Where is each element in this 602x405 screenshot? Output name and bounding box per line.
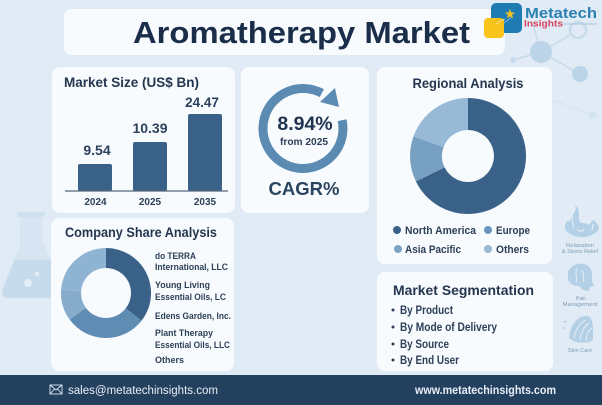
background network graphic (510, 22, 597, 119)
legend: regional: Others (496, 244, 529, 256)
legend: company names: Young Living (155, 280, 210, 291)
icon: relaxation and stress relief: & Stress Relief (562, 249, 599, 255)
legend: company names: Plant Therapy (155, 328, 214, 339)
segmentation list: By Mode of Delivery (400, 322, 498, 334)
panel: company share analysis (51, 218, 234, 371)
panel: market segmentation (377, 272, 553, 371)
segmentation list (392, 305, 498, 367)
bar chart: market size: 2025 (139, 197, 162, 208)
icon: relaxation and stress relief (562, 205, 599, 255)
bar chart: market size: 9.54 (83, 142, 111, 158)
legend: regional: Europe (496, 225, 530, 237)
segmentation list: By Source (400, 339, 449, 351)
bar chart: market size: 2024 (84, 197, 107, 208)
background flask illustration (2, 212, 52, 298)
panel: title (64, 9, 505, 55)
icon: pain management: Pain (576, 296, 586, 302)
legend: company names: Essential Oils, LLC (155, 340, 230, 351)
icon: skin care: Skin Care (568, 348, 592, 354)
bar chart: market size: 24.47 (185, 95, 219, 110)
logo: Metatech Insights: Metatech (525, 6, 597, 22)
legend: company names: Others (155, 355, 184, 366)
footer email: sales@metatechinsights.com (68, 385, 218, 397)
donut chart: company share (61, 248, 151, 338)
CAGR label: CAGR% (269, 178, 339, 199)
segmentation list: By Product (400, 305, 453, 317)
bar chart: market size (65, 95, 228, 208)
panel: regional analysis (377, 67, 552, 264)
bar chart: market size: 10.39 (132, 120, 168, 136)
legend: regional (393, 225, 530, 256)
heading: market segmentation: Market Segmentation (393, 282, 534, 298)
icon: circular arrow (263, 88, 343, 168)
heading: market size: Market Size (US$ Bn) (64, 74, 199, 90)
panel: market size (52, 67, 235, 213)
icon: relaxation and stress relief: Relaxation (566, 243, 594, 249)
icon: pain management (562, 264, 598, 308)
legend: company names: do TERRA (155, 251, 196, 262)
CAGR value: 8.94% (277, 113, 333, 135)
segmentation list: By End User (400, 355, 459, 367)
icon: pain management: Management (562, 302, 598, 308)
footer website: www.metatechinsights.com (414, 385, 556, 397)
heading: company share: Company Share Analysis (65, 225, 217, 240)
legend: regional: Asia Pacific (405, 244, 461, 256)
icon: skin care (563, 316, 593, 354)
logo: Metatech Insights (484, 3, 597, 38)
heading: regional analysis: Regional Analysis (412, 76, 524, 91)
legend: company names: Edens Garden, Inc. (155, 311, 231, 322)
footer (0, 375, 602, 405)
CAGR note: from 2025 (280, 137, 328, 148)
bar chart: market size: 2035 (194, 197, 217, 208)
legend: company names: International, LLC (155, 262, 228, 273)
logo: Metatech Insights: Insights (524, 18, 563, 30)
legend: company names (155, 251, 231, 366)
legend: regional: North America (405, 225, 477, 237)
panel: CAGR (241, 67, 369, 213)
title: Aromatherapy Market (133, 15, 470, 50)
icon: envelope (50, 385, 62, 394)
legend: company names: Essential Oils, LC (155, 292, 226, 303)
donut chart: regional (410, 98, 526, 214)
